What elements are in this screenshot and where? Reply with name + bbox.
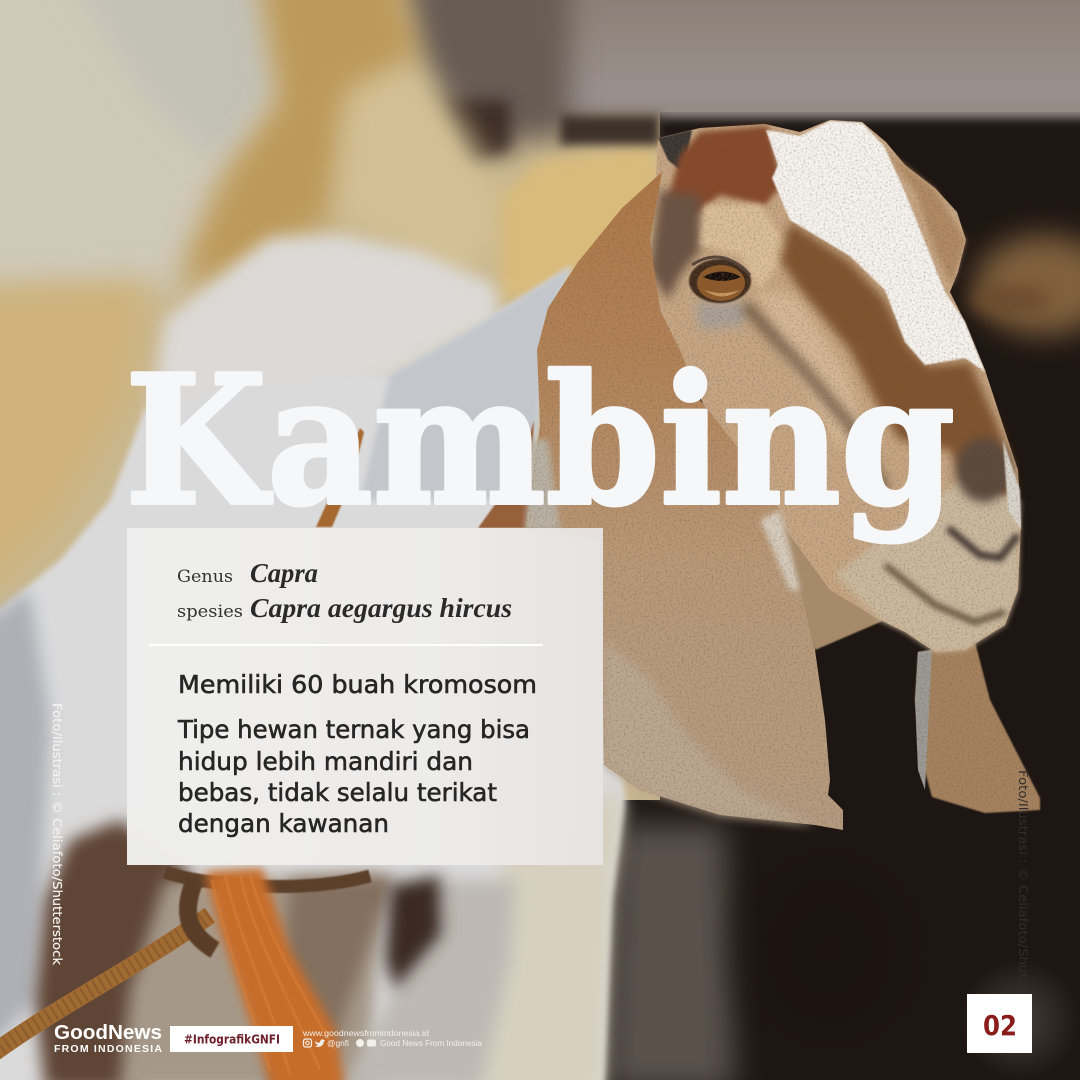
hashtag badge: #InfografikGNFI: [184, 1032, 280, 1046]
eye: [689, 257, 751, 303]
fact: independent livestock: dengan kawanan: [178, 809, 389, 838]
cream cheek band: [755, 290, 865, 450]
goat ear, left: [525, 172, 843, 830]
species label: spesies: [177, 602, 243, 622]
panel: taxonomy and facts: [127, 528, 603, 865]
cream brow: [700, 205, 790, 290]
nose: [956, 438, 1012, 502]
muzzle: [835, 480, 1020, 652]
grey brow: [650, 190, 700, 300]
blaze: [766, 121, 985, 372]
goat head: [650, 120, 1021, 652]
goat body: [0, 235, 625, 1080]
fact: independent livestock: hidup lebih mandiri dan: [178, 747, 473, 776]
icon: facebook: [356, 1039, 364, 1047]
genus value: Capra: [250, 558, 318, 588]
logo: GoodNews From Indonesia: GoodNews: [54, 1022, 162, 1044]
species value: Capra aegargus hircus: [250, 593, 512, 623]
collar straps: [316, 428, 364, 527]
brown patch on chest: [35, 820, 190, 1080]
icon: twitter: [315, 1039, 325, 1047]
fact: independent livestock: [177, 715, 530, 838]
logo: GoodNews From Indonesia: [54, 1022, 162, 1055]
horn stub: [658, 130, 692, 170]
brown forehead: [668, 126, 782, 225]
page number: 02: [983, 1009, 1017, 1042]
title: Kambing: [125, 336, 955, 545]
fact: independent livestock: Tipe hewan ternak yang bisa: [177, 715, 530, 744]
below eye: [695, 302, 745, 330]
genus label: Genus: [177, 567, 233, 587]
fact: chromosomes: Memiliki 60 buah kromosom: [178, 670, 537, 699]
fact: independent livestock: bebas, tidak selalu terikat: [178, 778, 497, 807]
website and social handles: [302, 1028, 482, 1048]
website and social handles: Good News From Indonesia: [380, 1038, 482, 1048]
rope and orange tassel: [0, 868, 370, 1080]
goat ear, right: [915, 642, 1040, 813]
hashtag badge: [170, 1026, 293, 1052]
page number: [967, 994, 1032, 1053]
goat neck under the jaw: [730, 440, 885, 650]
logo: GoodNews From Indonesia: FROM INDONESIA: [54, 1043, 162, 1055]
streak under blaze: [780, 222, 1016, 510]
photo credit: Foto/Ilustrasi : © Celiafoto/Shutterstock: [50, 703, 64, 965]
website and social handles: @gnfi: [327, 1038, 349, 1048]
faint photo credit, right: Foto/Ilustrasi : © Celiafoto/Shutterstock: [1016, 770, 1030, 1032]
icon: youtube: [367, 1040, 376, 1046]
mouth: [948, 528, 1018, 558]
icon: instagram: [304, 1039, 312, 1047]
dark streak from eye: [745, 305, 885, 490]
website and social handles: www.goodnewsfromindonesia.id: [302, 1028, 429, 1038]
